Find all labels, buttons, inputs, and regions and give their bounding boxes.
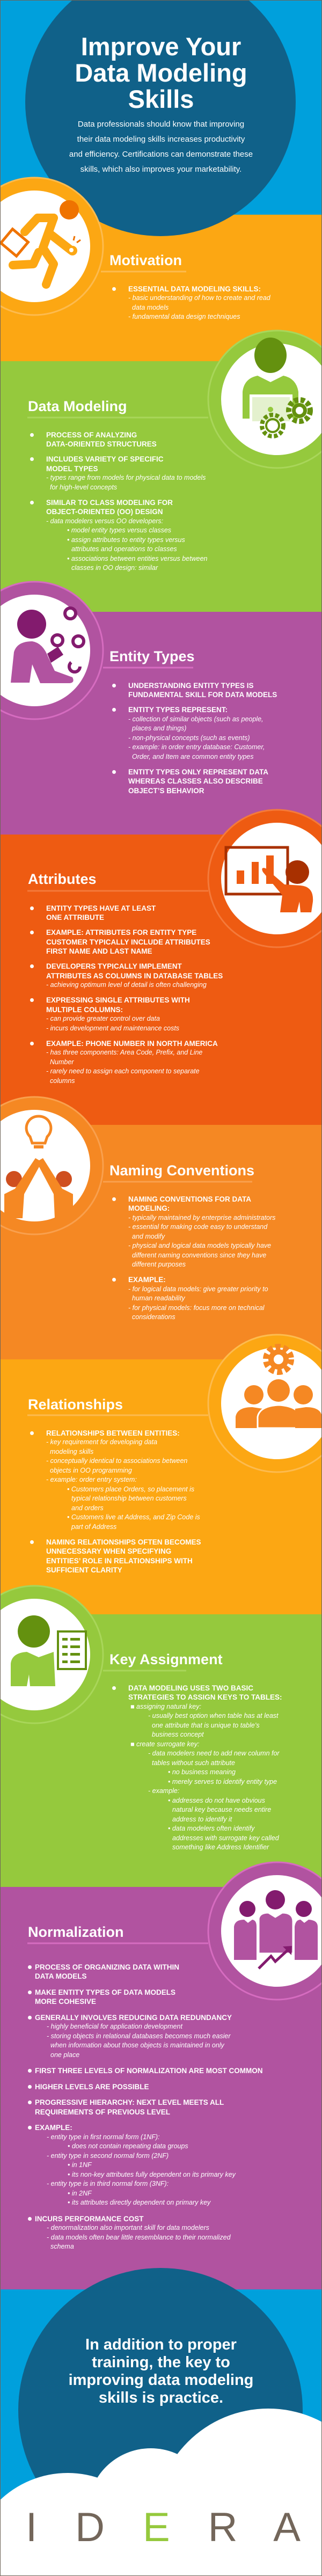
intro text: skills, which also improves your marketability. [80, 165, 241, 174]
text: key assignment: natural key because needs entire [172, 1806, 271, 1813]
intro text: and efficiency. Certifications can demonstrate these [69, 150, 253, 159]
text: key assignment: business concept [152, 1731, 204, 1738]
header dark circle [25, 0, 296, 236]
text: normalization: one place [50, 2051, 79, 2059]
text: data modeling [30, 430, 207, 572]
text: entity types: - non-physical concepts (such as events) [128, 734, 250, 742]
text: normalization: MAKE ENTITY TYPES OF DATA MODELS [35, 1988, 175, 1996]
intro text: Data professionals should know that improving [78, 120, 244, 129]
text: relationships: ENTITIES’ ROLE IN RELATIONSHIPS WITH [46, 1556, 193, 1565]
text: motivation: - fundamental data design techniques [128, 313, 240, 320]
text: motivation: - basic understanding of how to create and read [128, 294, 270, 302]
title: Improve Your [81, 32, 241, 61]
text: normalization: • does not contain repeating data groups [68, 2142, 188, 2150]
heading: Attributes: Attributes [28, 871, 97, 887]
text: naming conventions: human readability [132, 1294, 185, 1302]
text: motivation: data models [132, 304, 169, 311]
text: normalization: - entity type is in third normal form (3NF): [47, 2180, 169, 2187]
text: data modeling: PROCESS OF ANALYZING [46, 430, 137, 439]
text: normalization: MORE COHESIVE [35, 1997, 96, 2006]
text: key assignment: STRATEGIES TO ASSIGN KEYS TO TABLES: [128, 1693, 282, 1701]
text: entity types: ENTITY TYPES ONLY REPRESENT DATA [128, 767, 268, 776]
icon: team with rising arrow (normalization) [208, 1862, 322, 2000]
text: attributes: CUSTOMER TYPICALLY INCLUDE ATTRIBUTES [46, 938, 210, 946]
text: normalization: • in 1NF [68, 2161, 92, 2169]
heading: Motivation: Motivation [109, 252, 182, 268]
heading: Naming Conventions: Naming Conventions [109, 1162, 254, 1179]
text: naming conventions: EXAMPLE: [128, 1276, 166, 1284]
text: relationships: - key requirement for developing data [46, 1438, 157, 1446]
text: motivation [112, 284, 270, 320]
text: normalization: - entity type in first normal form (1NF): [47, 2133, 159, 2140]
text: attributes: - incurs development and maintenance costs [46, 1024, 179, 1031]
footer dark circle [18, 2268, 303, 2552]
icon: person with document (key assignment) [0, 1586, 103, 1723]
text: normalization [28, 1963, 263, 2250]
text: naming conventions: and modify [132, 1232, 165, 1240]
text: naming conventions: - for logical data models: give greater priority to [128, 1285, 268, 1292]
text: attributes [30, 904, 223, 1084]
text: naming conventions: - physical and logical data models typically have [128, 1242, 271, 1249]
text: attributes: - can provide greater control over data [46, 1015, 160, 1022]
text: normalization: DATA MODELS [35, 1972, 87, 1980]
text: attributes: ONE ATTRIBUTE [46, 913, 104, 921]
text: attributes: ATTRIBUTES AS COLUMNS IN DATABASE TABLES [46, 971, 223, 980]
icon: team with gear (relationships) [208, 1335, 322, 1472]
text: attributes: - has three components: Area Code, Prefix, and Line [46, 1049, 202, 1056]
text: key assignment: • addresses do not have obvious [168, 1797, 265, 1804]
text: normalization: GENERALLY INVOLVES REDUCING DATA REDUNDANCY [35, 2014, 232, 2021]
text: data modeling: DATA-ORIENTED STRUCTURES [46, 440, 157, 448]
text: entity types [112, 682, 277, 794]
icon: presenter with chart (attributes) [208, 810, 322, 947]
text: normalization: • its non-key attributes fully dependent on its primary key [68, 2170, 236, 2178]
text: normalization: - denormalization also important skill for data modelers [47, 2224, 209, 2231]
text: attributes: DEVELOPERS TYPICALLY IMPLEMENT [46, 962, 182, 970]
text: data modeling: OBJECT-ORIENTED (OO) DESIGN [46, 508, 163, 516]
text: naming conventions: MODELING: [128, 1204, 170, 1212]
text: attributes: EXPRESSING SINGLE ATTRIBUTES WITH [46, 996, 190, 1004]
text: data modeling: • associations between entities versus between [67, 555, 207, 562]
text: relationships: - example: order entry system: [46, 1476, 137, 1483]
closing statement: In addition to proper [85, 2336, 237, 2353]
underlines [27, 272, 252, 1943]
text: data modeling: - types range from models for physical data to models [46, 474, 206, 481]
text: attributes: EXAMPLE: ATTRIBUTES FOR ENTITY TYPE [46, 928, 196, 936]
text: attributes: columns [50, 1077, 75, 1084]
text: attributes: FIRST NAME AND LAST NAME [46, 947, 152, 955]
text: key assignment: address to identify it [172, 1815, 232, 1823]
icon: juggling person (entity types) [0, 582, 103, 719]
text: entity types: ENTITY TYPES REPRESENT: [128, 706, 228, 714]
text: entity types: - example: in order entry database: Customer, [128, 743, 265, 751]
text: attributes: Number [50, 1058, 74, 1066]
text: data modeling: classes in OO design: similar [71, 564, 158, 572]
text: entity types: OBJECT’S BEHAVIOR [128, 787, 204, 794]
icon: running man (motivation) [0, 178, 103, 315]
text: normalization: schema [50, 2243, 74, 2250]
text: data modeling: • model entity types versus classes [67, 526, 171, 534]
text: key assignment: - usually best option when table has at least [148, 1712, 279, 1719]
text: naming conventions: different naming conventions since they have [132, 1252, 266, 1259]
text: normalization: PROGRESSIVE HIERARCHY: NEXT LEVEL MEETS ALL [35, 2098, 224, 2106]
text: key assignment: ■ assigning natural key: [130, 1702, 201, 1710]
closing statement: skills is practice. [99, 2389, 223, 2406]
text: attributes: MULTIPLE COLUMNS: [46, 1006, 123, 1013]
text: naming conventions [112, 1195, 276, 1321]
text: normalization: - highly beneficial for application development [47, 2023, 182, 2030]
text: normalization: - storing objects in relational databases becomes much easier [47, 2032, 231, 2039]
text: relationships: • Customers place Orders, so placement is [67, 1485, 194, 1493]
text: key assignment: • merely serves to identify entity type [168, 1777, 277, 1785]
text: entity types: FUNDAMENTAL SKILL FOR DATA MODELS [128, 691, 277, 699]
intro text: their data modeling skills increases productivity [77, 135, 245, 144]
text: key assignment: • no business meaning [168, 1768, 236, 1776]
text: normalization: • in 2NF [68, 2190, 92, 2197]
text: entity types: Order, and Item are common entity types [132, 752, 253, 760]
text: relationships: NAMING RELATIONSHIPS OFTEN BECOMES [46, 1538, 201, 1546]
text: key assignment: - data modelers need to add new column for [148, 1750, 280, 1757]
footer cloud [0, 2409, 322, 2576]
text: normalization: - entity type in second normal form (2NF) [47, 2152, 169, 2160]
text: relationships: SUFFICIENT CLARITY [46, 1566, 122, 1574]
intro text [69, 120, 253, 174]
text: entity types: places and things) [132, 724, 186, 732]
closing statement [69, 2336, 253, 2406]
text: data modeling: INCLUDES VARIETY OF SPECIFIC [46, 455, 164, 463]
text: key assignment: something like Address Identifier [172, 1843, 269, 1851]
text: motivation: ESSENTIAL DATA MODELING SKILLS: [128, 284, 261, 293]
text: naming conventions: considerations [132, 1313, 175, 1321]
text: data modeling: for high-level concepts [50, 483, 117, 491]
text: key assignment: tables without such attribute [152, 1759, 235, 1767]
icon: person with laptop and gears (data modeling) [208, 331, 322, 468]
icon: high five with lightbulb (naming conventions) [0, 1097, 103, 1234]
text: normalization: REQUIREMENTS OF PREVIOUS LEVEL [35, 2108, 170, 2116]
text: normalization: HIGHER LEVELS ARE POSSIBLE [35, 2082, 149, 2091]
text: normalization: PROCESS OF ORGANIZING DATA WITHIN [35, 1963, 179, 1971]
title [75, 32, 247, 113]
text: normalization: • its attributes directly dependent on primary key [68, 2199, 210, 2206]
text: relationships: typical relationship between customers [71, 1495, 187, 1502]
text: data modeling: MODEL TYPES [46, 465, 98, 472]
text: key assignment [112, 1684, 282, 1851]
text: normalization: FIRST THREE LEVELS OF NORMALIZATION ARE MOST COMMON [35, 2067, 263, 2075]
closing statement: improving data modeling [69, 2372, 253, 2389]
text: naming conventions: - typically maintained by enterprise administrators [128, 1214, 275, 1221]
title: Skills [128, 85, 194, 113]
heading: Entity Types: Entity Types [109, 648, 195, 664]
text: key assignment: one attribute that is unique to table’s [152, 1722, 260, 1729]
text: naming conventions: different purposes [132, 1261, 186, 1268]
text: relationships: part of Address [71, 1523, 116, 1531]
text: key assignment: addresses with surrogate key called [172, 1834, 279, 1842]
logo: IDERA: I D E R A [26, 2505, 301, 2550]
text: attributes: ENTITY TYPES HAVE AT LEAST [46, 904, 156, 912]
text: key assignment: - example: [148, 1787, 179, 1795]
closing statement: training, the key to [92, 2354, 230, 2371]
text: key assignment: ■ create surrogate key: [130, 1740, 199, 1747]
text: normalization: INCURS PERFORMANCE COST [35, 2214, 144, 2223]
text: relationships: modeling skills [50, 1448, 93, 1455]
text: normalization: when information about those objects is maintained in only [50, 2041, 224, 2049]
text: relationships: UNNECESSARY WHEN SPECIFYING [46, 1547, 171, 1555]
text: data modeling: • assign attributes to entity types versus [67, 536, 185, 543]
text: relationships: • Customers live at Address, and Zip Code is [67, 1513, 200, 1521]
text: naming conventions: - essential for making code easy to understand [128, 1223, 267, 1231]
text: key assignment: • data modelers often identify [168, 1825, 254, 1832]
text: relationships: objects in OO programming [50, 1466, 132, 1474]
heading: Data Modeling: Data Modeling [28, 398, 127, 414]
text: naming conventions: NAMING CONVENTIONS FOR DATA [128, 1195, 251, 1203]
text: naming conventions: - for physical models: focus more on technical [128, 1304, 265, 1312]
text: entity types: WHEREAS CLASSES ALSO DESCRIBE [128, 777, 263, 785]
heading: Normalization: Normalization [28, 1924, 124, 1940]
text: entity types: - collection of similar objects (such as people, [128, 715, 264, 722]
text: relationships: - conceptually identical to associations between [46, 1457, 187, 1465]
heading: Key Assignment: Key Assignment [109, 1651, 223, 1667]
text: attributes: EXAMPLE: PHONE NUMBER IN NORTH AMERICA [46, 1039, 218, 1048]
text: data modeling: attributes and operations to classes [71, 545, 177, 553]
text: normalization: EXAMPLE: [35, 2124, 72, 2132]
heading: Relationships: Relationships [28, 1396, 123, 1413]
title: Data Modeling [75, 58, 247, 87]
text: data modeling: - data modelers versus OO developers: [46, 517, 163, 525]
text: normalization: - data models often bear little resemblance to their normalized [47, 2234, 231, 2241]
text: relationships: RELATIONSHIPS BETWEEN ENTITIES: [46, 1429, 180, 1437]
text: key assignment: DATA MODELING USES TWO BASIC [128, 1684, 253, 1692]
text: attributes: - rarely need to assign each component to separate [46, 1067, 200, 1075]
text: attributes: - achieving optimum level of detail is often challenging [46, 981, 207, 989]
text: data modeling: SIMILAR TO CLASS MODELING FOR [46, 498, 173, 507]
text: entity types: UNDERSTANDING ENTITY TYPES IS [128, 682, 254, 689]
text: relationships: and orders [71, 1504, 104, 1511]
text: relationships [30, 1429, 201, 1574]
